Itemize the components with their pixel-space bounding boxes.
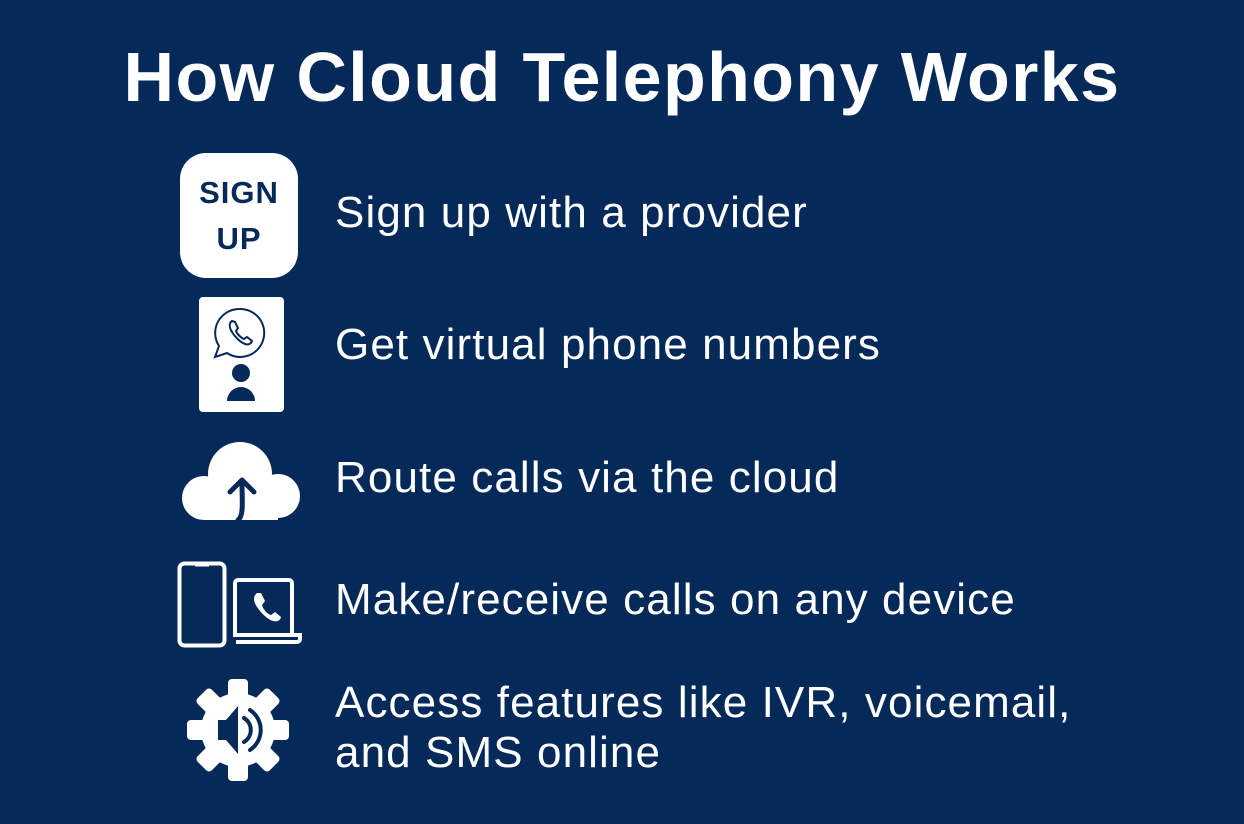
icon: sign up	[180, 153, 298, 278]
text: step 5: Access features like IVR, voicemail,	[335, 678, 1072, 727]
icon: devices	[178, 562, 302, 648]
icon: cloud upload	[182, 442, 300, 520]
icon: virtual number card	[199, 297, 284, 412]
icon: gear speaker	[187, 679, 289, 781]
title: How Cloud Telephony Works	[124, 38, 1120, 116]
text: step 1: Sign up with a provider	[335, 188, 808, 237]
text: step 2: Get virtual phone numbers	[335, 320, 881, 369]
text: step 5: and SMS online	[335, 728, 661, 777]
icon: sign up: UP	[216, 220, 262, 256]
text: step 5	[335, 678, 1072, 777]
text: step 3: Route calls via the cloud	[335, 453, 839, 502]
icon: sign up: SIGN	[199, 174, 279, 210]
text: step 4: Make/receive calls on any device	[335, 575, 1016, 624]
